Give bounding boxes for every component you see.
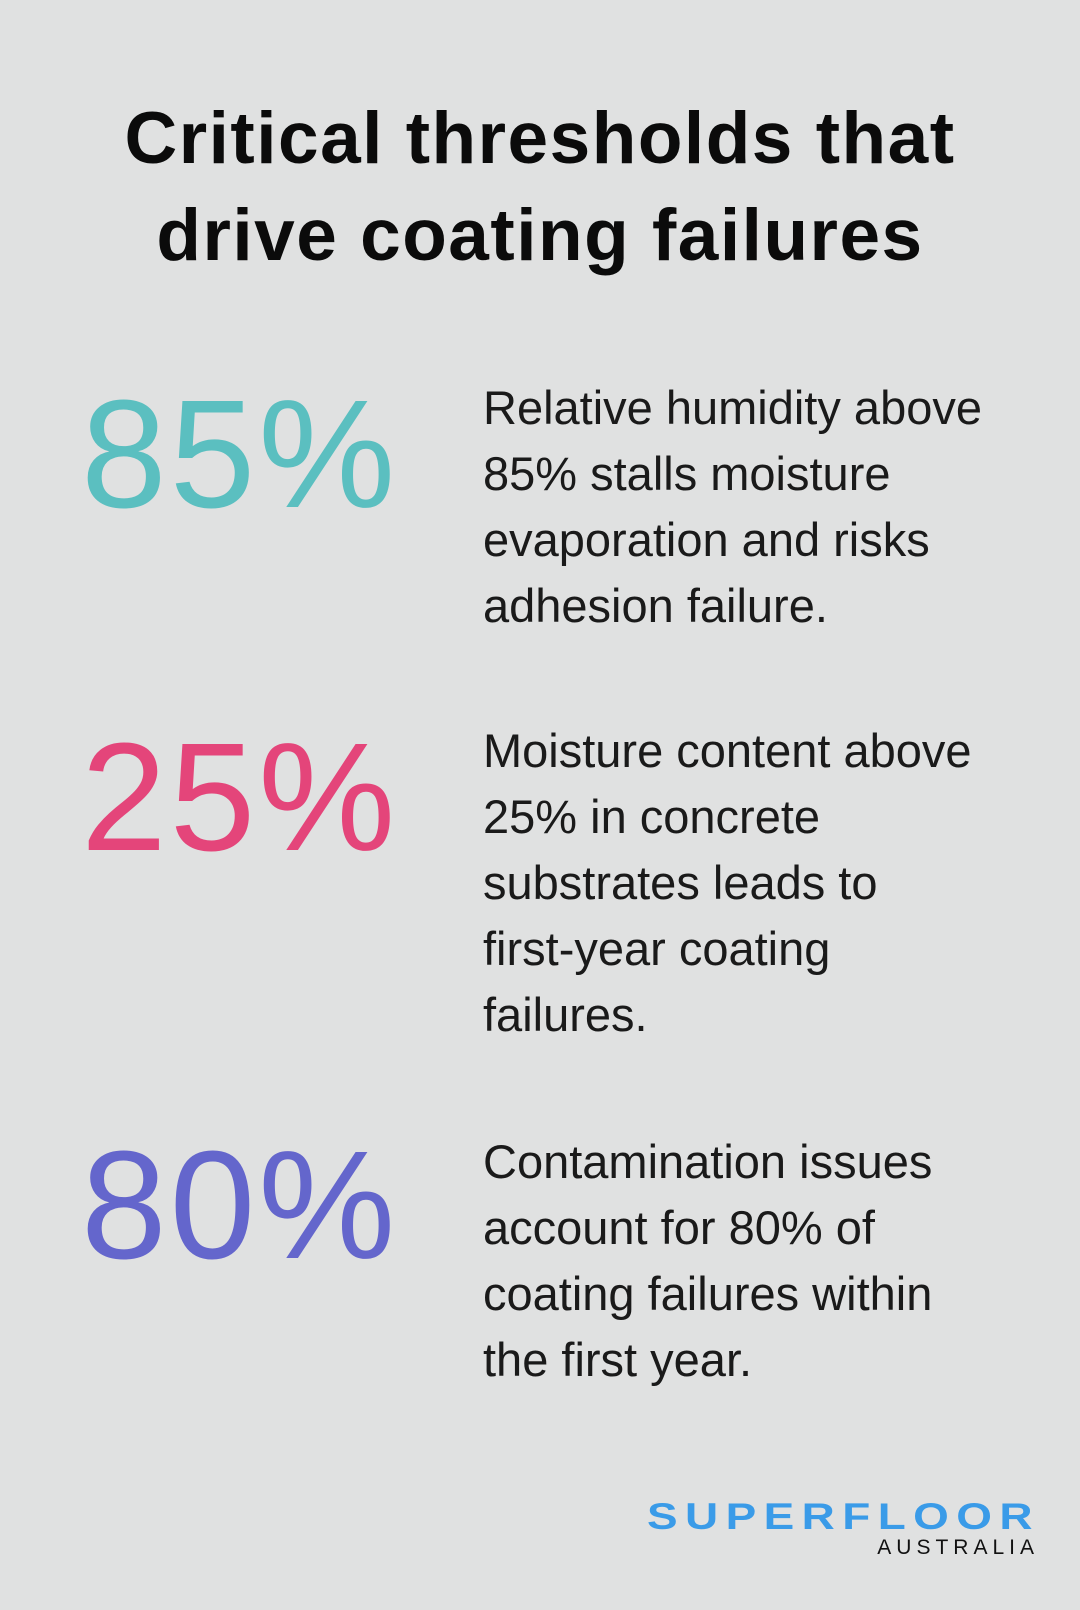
text: moisture content: Moisture content above: [483, 724, 972, 777]
text: contamination: the first year.: [483, 1333, 752, 1386]
text: moisture content: 25% in concrete: [483, 790, 820, 843]
text: contamination: coating failures within: [483, 1267, 932, 1320]
text: humidity: evaporation and risks: [483, 513, 930, 566]
text: moisture content: substrates leads to: [483, 856, 878, 909]
logo: AUSTRALIA: [877, 1536, 1039, 1559]
text: humidity: adhesion failure.: [483, 579, 828, 632]
text: humidity: [483, 381, 982, 632]
title: Critical thresholds that: [124, 98, 956, 179]
text: humidity: Relative humidity above: [483, 381, 982, 434]
text: contamination: [483, 1135, 932, 1386]
title: drive coating failures: [156, 195, 924, 276]
text: contamination: Contamination issues: [483, 1135, 932, 1188]
stat: 25%: 25%: [81, 711, 398, 883]
title: [124, 98, 956, 276]
logo: SUPERFLOOR: [647, 1496, 1040, 1537]
text: moisture content: first-year coating: [483, 922, 830, 975]
stat: 85%: 85%: [81, 368, 398, 540]
text: contamination: account for 80% of: [483, 1201, 875, 1254]
text: moisture content: [483, 724, 972, 1041]
logo: [647, 1496, 1040, 1559]
text: humidity: 85% stalls moisture: [483, 447, 890, 500]
stat: 80%: 80%: [81, 1119, 398, 1291]
text: moisture content: failures.: [483, 988, 648, 1041]
